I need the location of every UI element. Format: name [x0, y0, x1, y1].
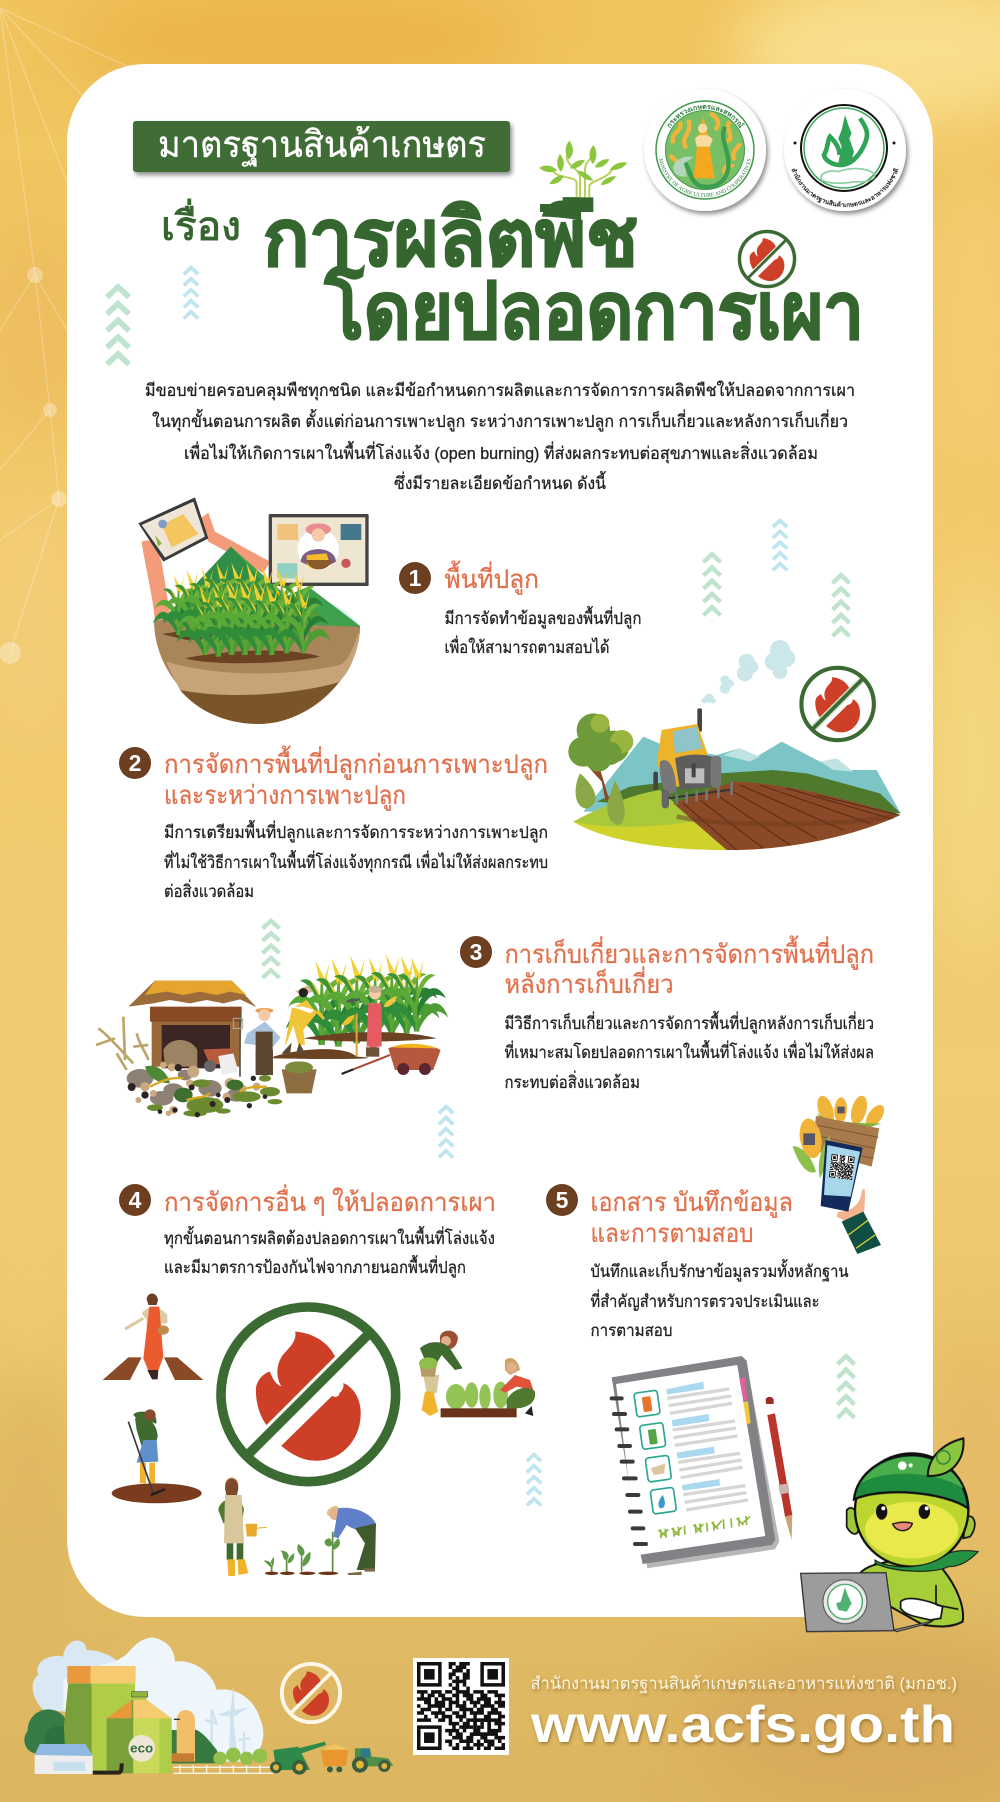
- section 1: เพื่อให้สามารถตามสอบได้: [444, 635, 610, 657]
- illustration: harvest and hut: [96, 954, 448, 1117]
- section 3: มีวิธีการเก็บเกี่ยวและการจัดการพื้นที่ปลูกหลังการเก็บเกี่ยว: [504, 1011, 874, 1034]
- title: [161, 194, 864, 355]
- illustration: farmers around no-burning sign: [103, 1294, 535, 1576]
- section 5: 5: [556, 1187, 569, 1213]
- section 5: การตามสอบ: [590, 1321, 672, 1340]
- section 1: 1: [409, 565, 422, 591]
- text: introduction: [145, 380, 855, 493]
- footer text: สำนักงานมาตรฐานสินค้าเกษตรและอาหารแห่งชาติ (มกอช.): [530, 1674, 957, 1694]
- section 5: ที่สำคัญสำหรับการตรวจประเมินและ: [590, 1289, 820, 1311]
- illustration: tractor on ploughed field: [568, 640, 901, 850]
- section 3: หลังการเก็บเกี่ยว: [504, 966, 674, 999]
- footer text: [530, 1674, 957, 1754]
- illustration: planting area with corn: [138, 497, 369, 724]
- section 4: การจัดการอื่น ๆ ให้ปลอดการเผา: [164, 1184, 496, 1217]
- section 4: ทุกขั้นตอนการผลิตต้องปลอดการเผาในพื้นที่โล่งแจ้ง: [164, 1226, 495, 1249]
- section 1: [399, 560, 642, 657]
- section 4: 4: [129, 1187, 142, 1213]
- icon: seedling: [539, 141, 627, 212]
- section 5: และการตามสอบ: [590, 1218, 754, 1248]
- section 5: [546, 1184, 849, 1340]
- section 4: และมีมาตรการป้องกันไฟจากภายนอกพื้นที่ปลูก: [164, 1255, 466, 1278]
- logo: ACFS: สำนักงานมาตรฐานสินค้าเกษตรและอาหารแห่งชาติ: [792, 168, 899, 208]
- decorative chevrons: [107, 268, 854, 1506]
- footer text: www.acfs.go.th: [530, 1696, 955, 1754]
- section 5: เอกสาร บันทึกข้อมูล: [590, 1187, 793, 1218]
- logo: ministry of agriculture: กระทรวงเกษตรและสหกรณ์: [668, 104, 745, 128]
- logo: ministry of agriculture: [643, 88, 771, 218]
- section 2: ต่อสิ่งแวดล้อม: [164, 879, 254, 901]
- title: โดยปลอดการเผา: [324, 265, 864, 355]
- title: การผลิตพืช: [263, 194, 638, 282]
- section 3: 3: [470, 939, 482, 965]
- text: introduction: มีขอบข่ายครอบคลุมพืชทุกชนิด และมีข้อกำหนดการผลิตและการจัดการการผลิตพืชให้ปลอดจากการเผา: [145, 380, 855, 401]
- section 3: ที่เหมาะสมโดยปลอดการเผาในพื้นที่โล่งแจ้ง เพื่อไม่ให้ส่งผล: [504, 1040, 874, 1062]
- section 2: มีการเตรียมพื้นที่ปลูกและการจัดการระหว่างการเพาะปลูก: [164, 820, 548, 843]
- footer illustration: [24, 1637, 393, 1775]
- section 2: ที่ไม่ใช้วิธีการเผาในพื้นที่โล่งแจ้งทุกกรณี เพื่อไม่ให้ส่งผลกระทบ: [164, 850, 548, 873]
- icon: no burning footer: [282, 1664, 340, 1722]
- illustration: corn crate and phone with QR: [793, 1094, 888, 1254]
- mascot: [801, 1438, 978, 1632]
- text: introduction: ซึ่งมีรายละเอียดข้อกำหนด ดังนี้: [394, 471, 606, 493]
- logo: ministry of agriculture: MINISTRY OF AGRICULTURE AND COOPERATIVES: [658, 158, 751, 197]
- QR code: [413, 1658, 509, 1755]
- section 2: 2: [129, 750, 141, 776]
- text: introduction: ในทุกขั้นตอนการผลิต ตั้งแต่ก่อนการเพาะปลูก ระหว่างการเพาะปลูก การเก็บเกี่ยวและหลังการเก็บเกี่ยว: [152, 409, 848, 432]
- section 3: [460, 935, 874, 1092]
- panel: white card: [67, 64, 933, 1617]
- section 1: มีการจัดทำข้อมูลของพื้นที่ปลูก: [444, 606, 642, 629]
- logo: ACFS: [783, 88, 911, 218]
- text: introduction: เพื่อไม่ให้เกิดการเผาในพื้นที่โล่งแจ้ง (open burning) ที่ส่งผลกระทบต่อสุขภาพและสิ่งแวดล้อม: [184, 441, 818, 464]
- icon: no burning small: [739, 231, 795, 287]
- section 2: การจัดการพื้นที่ปลูกก่อนการเพาะปลูก: [164, 745, 548, 780]
- section 3: การเก็บเกี่ยวและการจัดการพื้นที่ปลูก: [504, 935, 874, 970]
- banner: heading: มาตรฐานสินค้าเกษตร: [158, 124, 486, 167]
- section 1: พื้นที่ปลูก: [444, 560, 539, 595]
- footer illustration: eco: [130, 1741, 153, 1756]
- illustration: notebook and pencil: [612, 1356, 792, 1568]
- title: เรื่อง: [161, 199, 241, 249]
- icon: no burning: [801, 668, 874, 740]
- section 3: กระทบต่อสิ่งแวดล้อม: [504, 1070, 640, 1092]
- icon: large no burning: [221, 1307, 396, 1482]
- section 2: และระหว่างการเพาะปลูก: [164, 780, 406, 811]
- section 5: บันทึกและเก็บรักษาข้อมูลรวมทั้งหลักฐาน: [590, 1259, 849, 1282]
- section 4: [119, 1184, 496, 1278]
- section 2: [119, 745, 548, 901]
